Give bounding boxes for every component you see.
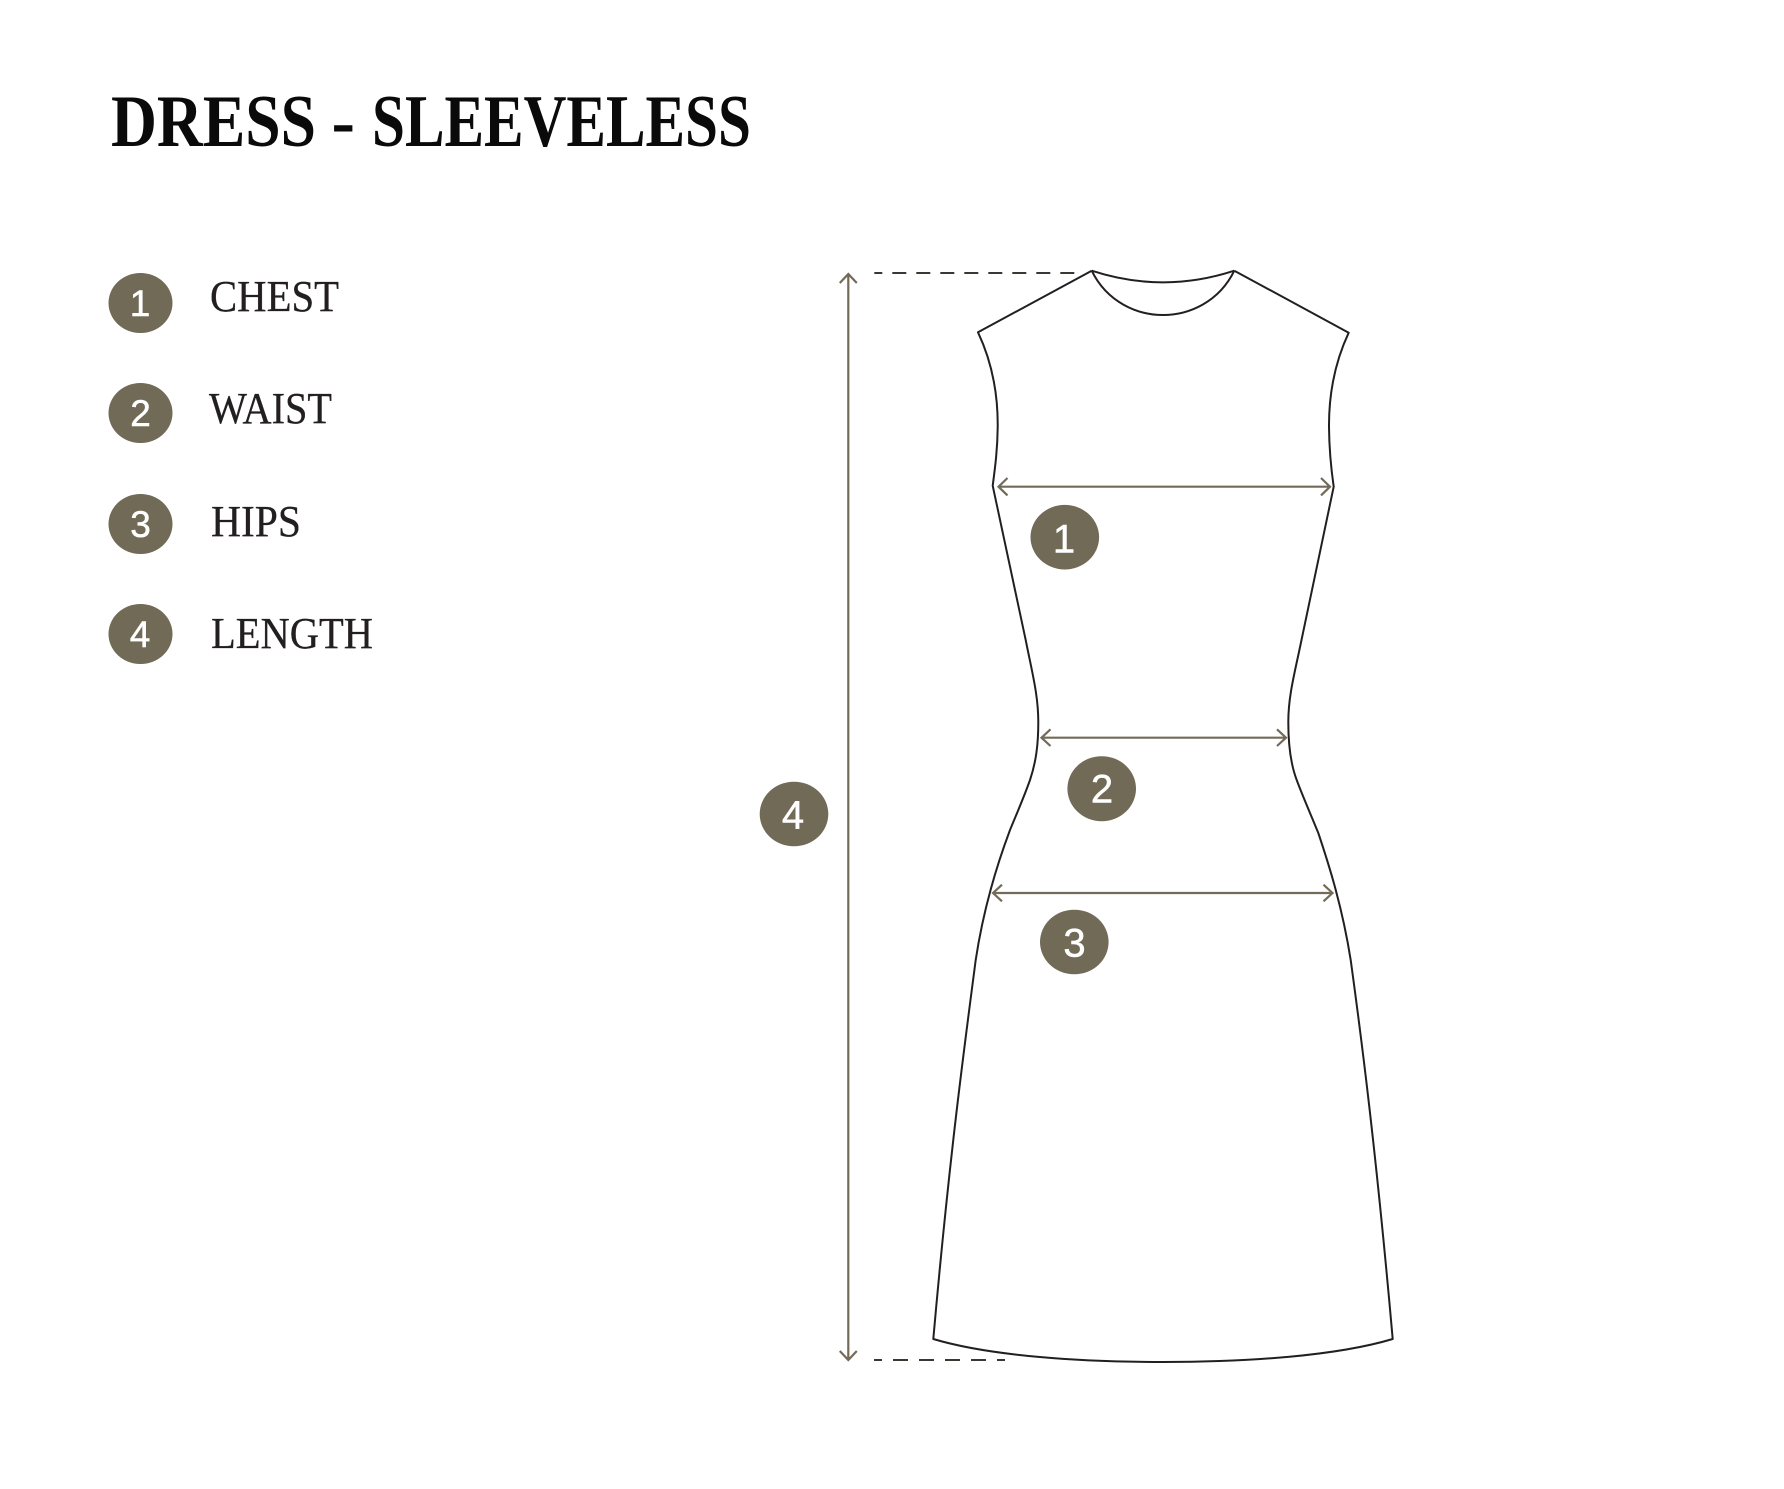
marker 3: hips: 3 (1063, 922, 1086, 966)
title: DRESS (111, 81, 316, 163)
title: - (332, 81, 355, 163)
marker 3: hips (1040, 910, 1109, 974)
legend item: length (108, 604, 373, 664)
marker 1: chest: 1 (1053, 518, 1075, 562)
arrow: hips (992, 885, 1333, 901)
legend item: hips: 3 (130, 504, 151, 545)
legend item: hips (108, 494, 301, 554)
guide: top dashed line (874, 272, 1074, 274)
title: SLEEVELESS (372, 81, 751, 163)
marker 4: length: 4 (782, 793, 804, 837)
arrow: waist (1041, 729, 1286, 746)
neckline (1092, 271, 1234, 315)
marker 2: waist: 2 (1091, 768, 1113, 812)
legend item: chest: 1 (130, 283, 150, 324)
marker 4: length (760, 782, 828, 846)
legend item: hips: HIPS (211, 497, 301, 546)
title (111, 81, 751, 163)
legend item: waist: WAIST (209, 384, 332, 433)
arrow: length (840, 274, 857, 1360)
dress outline (933, 271, 1393, 1362)
legend item: chest: CHEST (210, 272, 339, 321)
legend item: length: LENGTH (211, 609, 373, 658)
arrow: chest (998, 478, 1330, 495)
marker 2: waist (1067, 756, 1136, 821)
legend (108, 272, 373, 664)
guide: bottom dashed line (874, 1359, 1005, 1361)
legend item: length: 4 (130, 614, 150, 655)
legend item: waist (108, 383, 332, 443)
marker 1: chest (1030, 505, 1099, 570)
legend item: waist: 2 (130, 393, 151, 434)
legend item: chest (108, 272, 339, 333)
